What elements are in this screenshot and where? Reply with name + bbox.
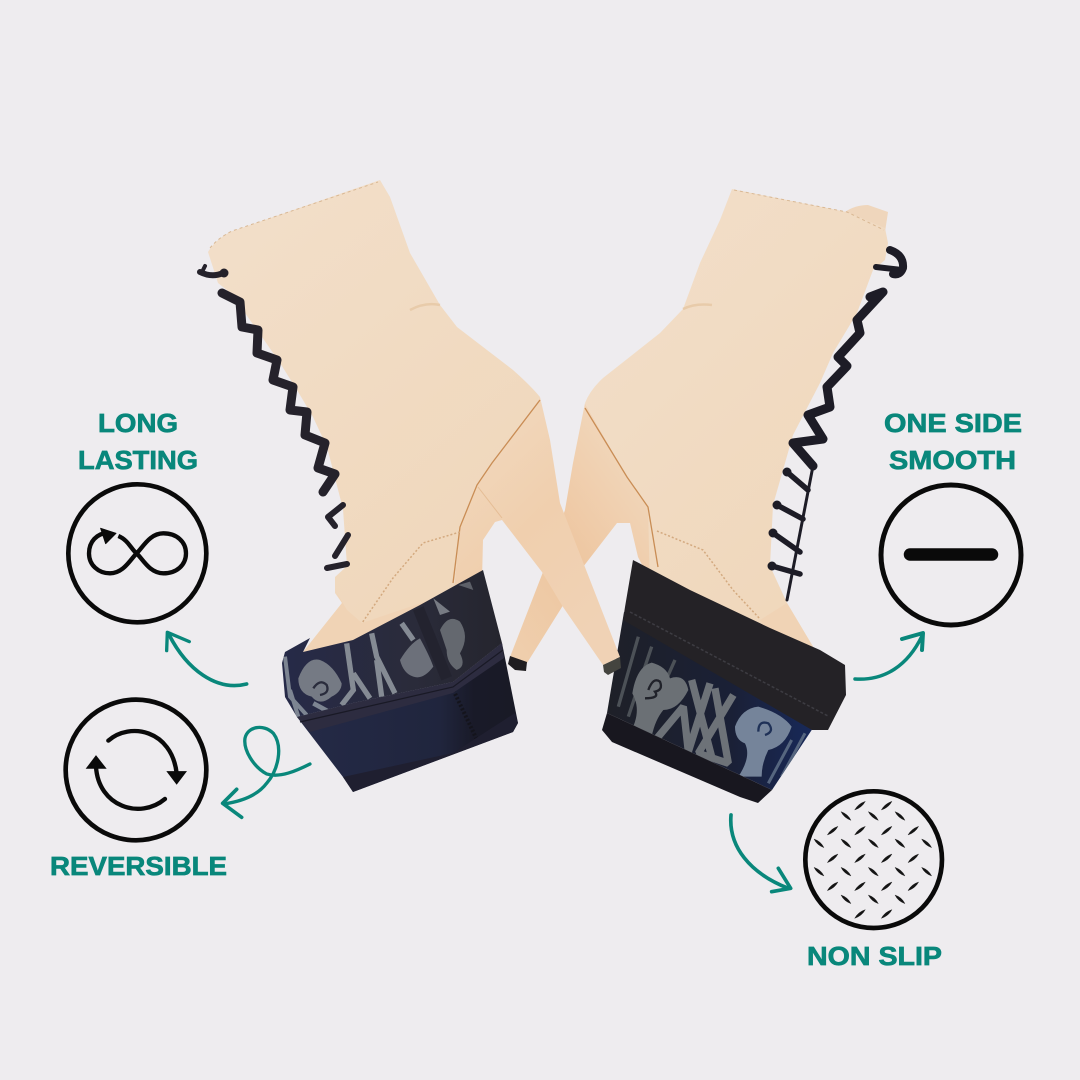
right boot with platform cover [508, 189, 903, 803]
left platform seam band [297, 643, 504, 732]
right boot heel and stiletto [510, 403, 660, 663]
left toe vamp [303, 590, 430, 660]
left boot seams [453, 400, 540, 583]
left pattern damask [298, 660, 342, 702]
label: long lasting: LASTING [78, 445, 198, 475]
label: one side smooth: ONE SIDE [884, 408, 1022, 438]
right boot laces [769, 250, 903, 600]
label: long lasting [78, 408, 198, 475]
label: reversible: REVERSIBLE [50, 851, 227, 881]
left platform lower panel [297, 643, 518, 792]
left boot heel and stiletto [453, 397, 620, 665]
right pattern zigzag [655, 680, 733, 763]
left platform patterned band [282, 570, 502, 717]
icon: infinity circle [68, 484, 206, 622]
left boot laces [200, 266, 348, 568]
left platform vertical seam [450, 683, 478, 742]
right boot upper [585, 189, 888, 670]
icon: non slip circle [805, 791, 942, 928]
right platform bottom strip [602, 713, 772, 803]
label: non slip: NON SLIP [807, 941, 942, 971]
arrow to one side smooth [855, 633, 923, 679]
right boot seams [585, 408, 658, 567]
icon: minus circle [881, 485, 1021, 625]
left boot with platform cover [200, 180, 621, 792]
right pattern stripes [618, 637, 675, 717]
label: one side smooth [884, 408, 1022, 475]
right toe vamp [760, 603, 815, 670]
right band stitch [630, 612, 828, 716]
right boot tongue [845, 205, 888, 232]
label: one side smooth: SMOOTH [889, 445, 1016, 475]
left pattern stripes [285, 657, 307, 717]
arrow to long lasting [167, 632, 247, 686]
right platform black top band [623, 560, 846, 730]
arrow to reversible [223, 727, 310, 817]
left stiletto tip [603, 657, 621, 675]
icon: reversible circle [66, 700, 206, 840]
right stiletto tip [508, 656, 527, 671]
left pattern seam [418, 608, 447, 678]
right pattern damask [632, 663, 688, 737]
label: long lasting: LONG [98, 408, 178, 438]
arrow to non slip [731, 815, 791, 892]
left boot upper [208, 180, 540, 665]
right platform patterned panel [607, 612, 815, 790]
left platform bottom strip [343, 713, 518, 792]
left pattern zigzag [342, 623, 413, 705]
